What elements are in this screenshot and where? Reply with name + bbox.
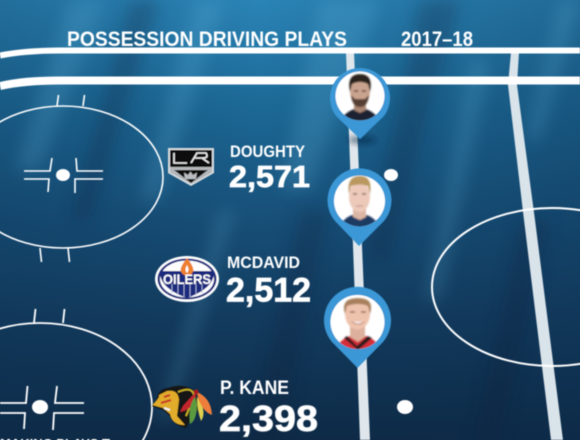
pin: Doughty xyxy=(330,68,390,144)
stat: Doughty: 2,571 xyxy=(229,159,310,194)
player name: McDavid: MCDAVID xyxy=(227,253,300,272)
title: POSSESSION DRIVING PLAYS xyxy=(67,28,347,51)
right vertical line xyxy=(508,52,563,440)
top board line xyxy=(0,50,580,56)
lower face-off dot xyxy=(32,400,48,414)
upper face-off dot xyxy=(56,169,70,181)
centre vertical line xyxy=(346,52,370,440)
neutral zone dot upper xyxy=(384,169,398,181)
logo: Chicago Blackhawks xyxy=(152,386,212,428)
second board line xyxy=(0,80,580,86)
player name: P. Kane: P. KANE xyxy=(220,378,289,399)
logo: Los Angeles Kings xyxy=(168,148,214,186)
pin: P. Kane xyxy=(324,287,391,368)
stat: McDavid: 2,512 xyxy=(226,272,311,310)
logo: Edmonton Oilers xyxy=(155,256,219,302)
player name: Doughty: DOUGHTY xyxy=(230,143,305,161)
logo: Edmonton Oilers: OILERS xyxy=(163,271,211,287)
pin: McDavid xyxy=(328,168,392,246)
neutral zone dot lower xyxy=(397,400,413,414)
right face-off circle xyxy=(432,208,580,366)
stat: P. Kane: 2,398 xyxy=(219,398,318,439)
left lower face-off circle xyxy=(0,309,152,440)
season label: 2017–18 xyxy=(401,28,473,51)
left upper face-off circle xyxy=(0,95,163,262)
